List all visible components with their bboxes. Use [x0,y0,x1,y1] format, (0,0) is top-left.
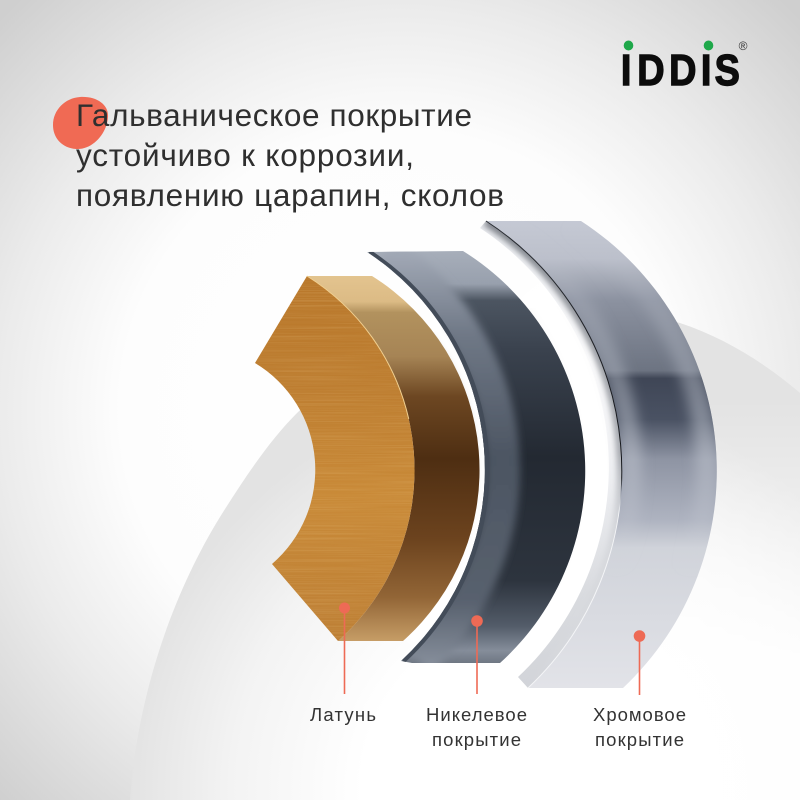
logo: IDDIS: IDDIS [621,45,740,95]
icon: green dot right [704,40,713,50]
nickel inner band [369,252,503,661]
callout: nickel marker [471,615,483,694]
title: появлению царапин, сколов [76,177,504,213]
brass side wall [307,276,480,641]
nickel segment [367,251,585,663]
label: chrome coating: Хромовое [593,704,686,725]
chrome segment [480,221,717,688]
label: chrome coating [593,704,686,750]
callout: brass marker [339,602,350,694]
label: nickel coating: Никелевое [426,704,527,725]
title: устойчиво к коррозии, [76,137,414,173]
label: brass: Латунь [310,704,376,725]
brass segment [250,270,480,645]
label: nickel coating [426,704,527,750]
chrome rim [480,221,622,688]
background disc [130,228,800,800]
label: nickel coating: покрытие [432,729,521,750]
brass front face [255,276,415,641]
title accent blob [53,97,108,149]
chrome shading [569,292,716,511]
label: chrome coating: покрытие [595,729,684,750]
title [76,97,504,213]
registered mark: ® [739,39,748,53]
icon: green dot left [624,40,633,50]
callout: chrome marker [634,630,645,695]
title: Гальваническое покрытие [76,97,472,133]
